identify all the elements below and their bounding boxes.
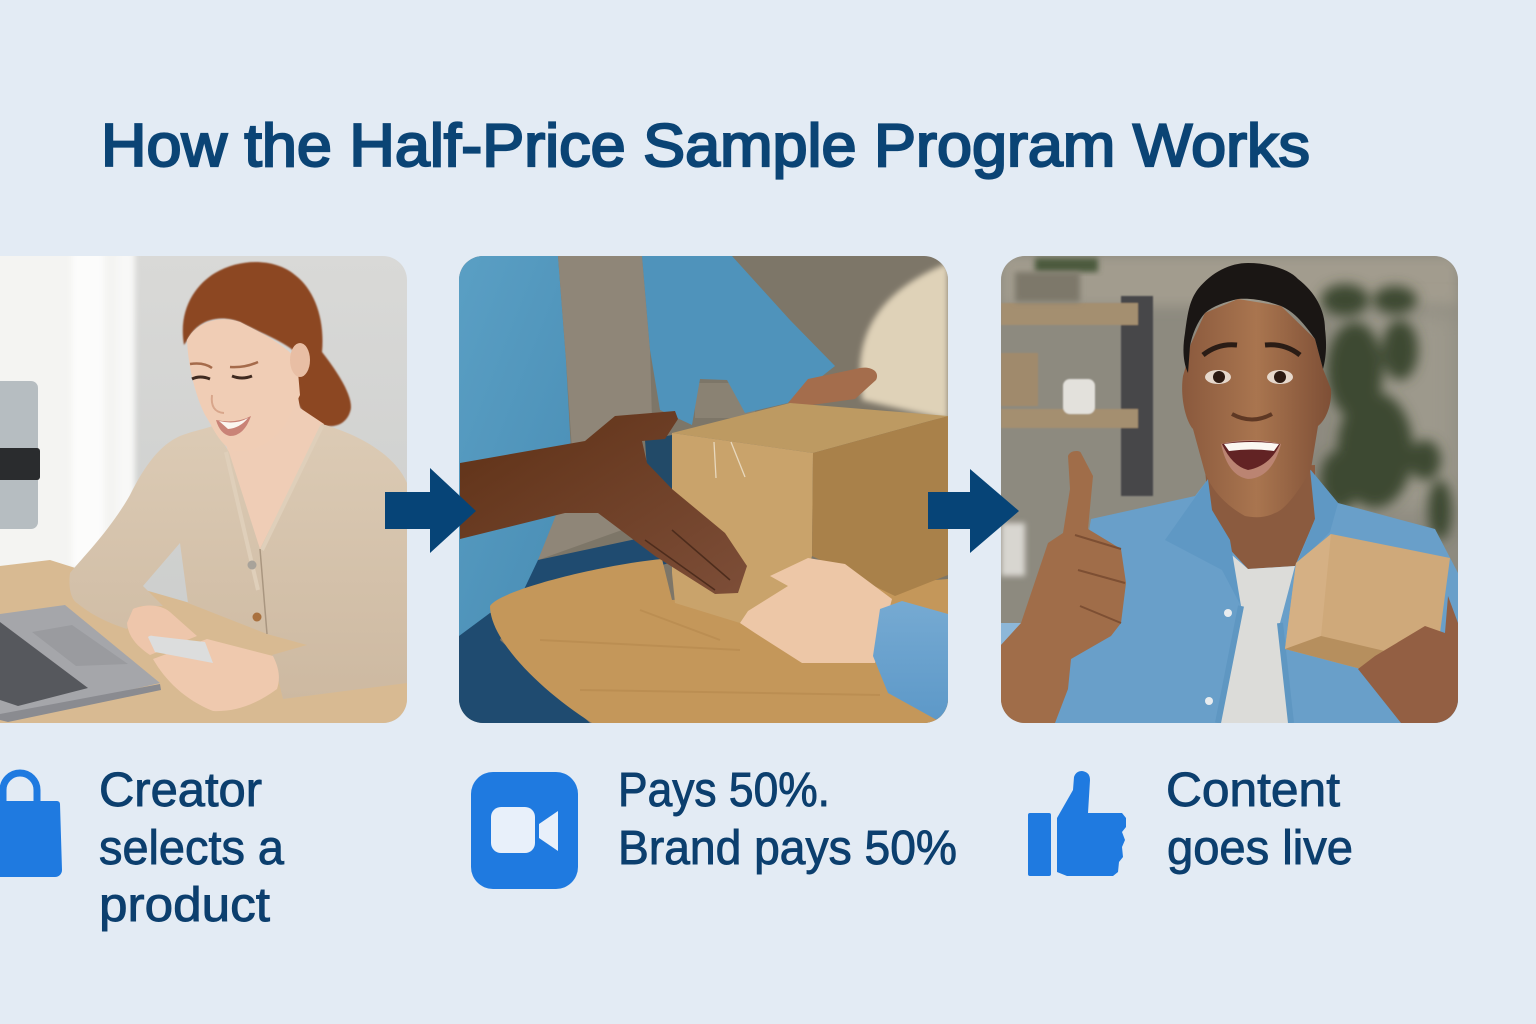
back hand [788, 368, 877, 405]
table [490, 559, 948, 723]
holding hand [153, 639, 279, 711]
nose [212, 395, 224, 413]
text: step 3 caption: goes live [1167, 822, 1353, 875]
shelves [1001, 296, 1153, 496]
title: How the Half-Price Sample Program Works [101, 112, 1310, 179]
face [187, 319, 300, 451]
denim shirt [1053, 469, 1458, 723]
curtain [0, 250, 135, 570]
denim shirt left [459, 256, 570, 636]
text: step 1 caption: product [99, 879, 270, 932]
text: step 1 caption: Creator [99, 764, 262, 817]
box [672, 403, 948, 623]
pillow [860, 263, 948, 420]
holding hand [1358, 596, 1458, 723]
panel: package handover photo [459, 256, 948, 723]
top plant [1035, 258, 1098, 272]
t-shirt [1218, 549, 1295, 723]
text: step 2 caption [618, 764, 957, 875]
light hand [740, 558, 892, 663]
dark shirt shadow behind hand [645, 435, 672, 490]
jacket right side [642, 256, 835, 425]
text: step 2 caption: Brand pays 50% [618, 822, 957, 875]
thumbs up hand [1001, 451, 1126, 723]
text: step 1 caption: selects a [99, 822, 284, 875]
nose [1232, 414, 1272, 420]
neck and chest [226, 398, 324, 548]
collars [1165, 479, 1241, 606]
icon: shopping bag [0, 773, 62, 877]
neck [1205, 465, 1315, 569]
woman [69, 262, 407, 711]
hair [183, 262, 351, 426]
head [1182, 299, 1331, 517]
eyes [1205, 370, 1231, 384]
laptop [0, 605, 161, 722]
left sleeve corner [1001, 623, 1022, 645]
smile [216, 416, 251, 436]
buttons [248, 560, 256, 570]
desk [0, 560, 407, 723]
phone [148, 636, 213, 663]
t-shirt [538, 256, 652, 560]
icon: video camera [471, 772, 578, 889]
text: step 2 caption: Pays 50%. [618, 764, 830, 817]
cardigan [69, 424, 407, 699]
man [1001, 263, 1458, 723]
denim sleeve [873, 601, 948, 723]
fingers hand [127, 606, 197, 655]
text: step 3 caption: Content [1166, 764, 1340, 817]
panel: happy creator photo [1001, 256, 1458, 723]
dark arm and hand [460, 411, 747, 594]
mouth [1221, 440, 1281, 479]
icon: thumbs up [1028, 771, 1126, 876]
lower blurred object [1001, 523, 1025, 576]
phone on tripod holder [0, 381, 40, 529]
plant [1320, 284, 1452, 540]
text: step 1 caption [99, 764, 284, 932]
panel: creator selecting a product photo [0, 250, 407, 723]
placket [1218, 606, 1291, 723]
text: step 3 caption [1166, 764, 1353, 875]
shirt buttons [1224, 609, 1232, 617]
eyebrows and eyes [190, 362, 258, 368]
small box [1285, 534, 1450, 669]
arrow: step 1 to step 2 [385, 468, 476, 553]
ear [290, 343, 310, 377]
hair [1183, 263, 1326, 373]
jeans [459, 535, 680, 723]
arrow: step 2 to step 3 [928, 469, 1019, 553]
